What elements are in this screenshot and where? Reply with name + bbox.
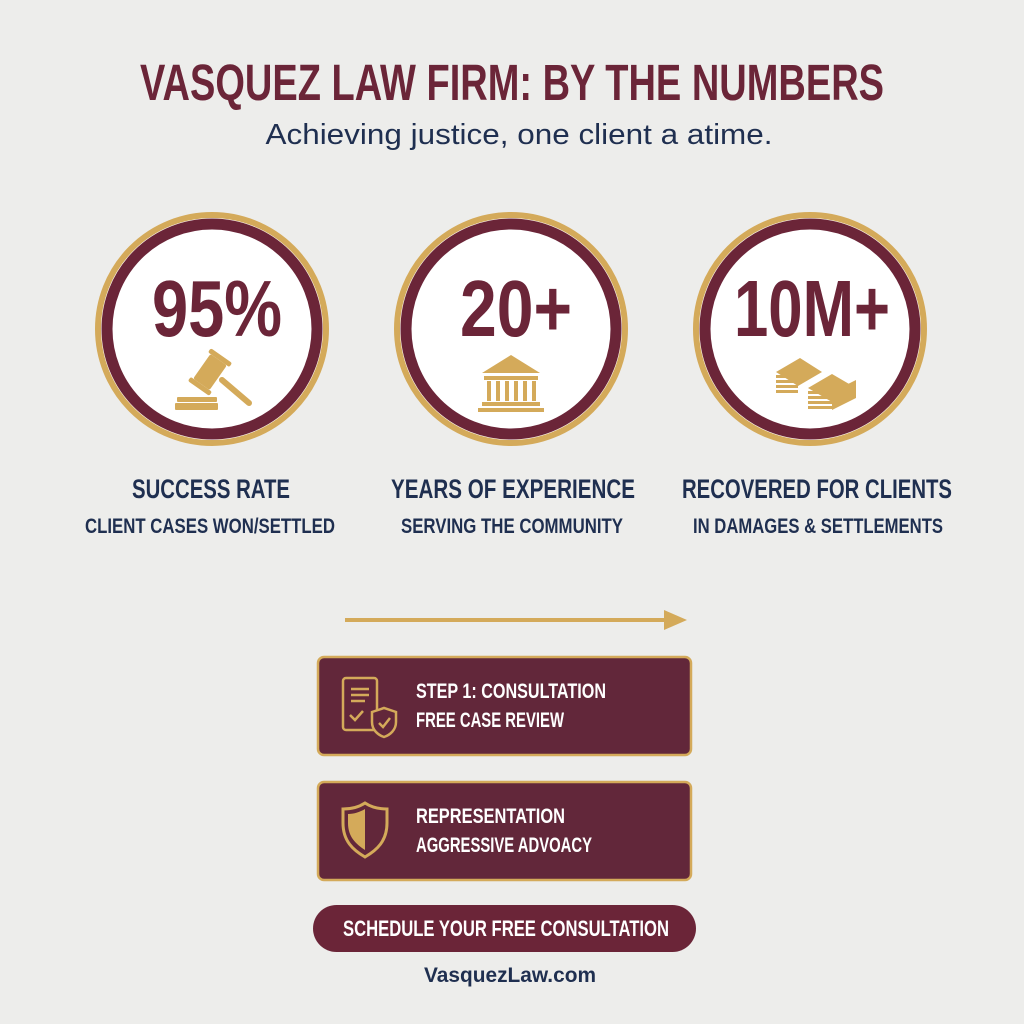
- stat: success rate: [85, 215, 335, 538]
- url: VasquezLaw.com: [424, 964, 596, 987]
- stat: success rate: CLIENT CASES WON/SETTLED: [85, 515, 335, 538]
- step 2 box: AGGRESSIVE ADVOACY: [416, 834, 592, 857]
- stat: recovered: 10M+: [734, 264, 890, 353]
- stat: years: 20+: [460, 264, 572, 353]
- step 1 box: FREE CASE REVIEW: [416, 709, 564, 732]
- step 1 box: STEP 1: CONSULTATION: [416, 680, 606, 703]
- icon: money stacks: [776, 358, 856, 410]
- stat: success rate: 95%: [152, 264, 282, 353]
- icon: shield: [343, 803, 387, 857]
- stat: recovered: [682, 215, 952, 538]
- label: SUCCESS RATE: [132, 474, 290, 504]
- stat: years: SERVING THE COMMUNITY: [401, 515, 623, 538]
- icon: gavel: [175, 348, 249, 410]
- step 1 box: [318, 657, 691, 755]
- icon: courthouse: [478, 355, 544, 412]
- button: SCHEDULE YOUR FREE CONSULTATION: [343, 916, 669, 941]
- button: [313, 905, 696, 952]
- stat: years: [391, 215, 635, 538]
- stat: recovered: IN DAMAGES & SETTLEMENTS: [693, 515, 943, 538]
- arrow: [345, 610, 687, 630]
- label: YEARS OF EXPERIENCE: [391, 474, 635, 504]
- step 2 box: [318, 782, 691, 880]
- icon: checklist: [343, 678, 396, 737]
- subtitle: Achieving justice, one client a atime.: [266, 119, 772, 151]
- step 2 box: REPRESENTATION: [416, 805, 565, 828]
